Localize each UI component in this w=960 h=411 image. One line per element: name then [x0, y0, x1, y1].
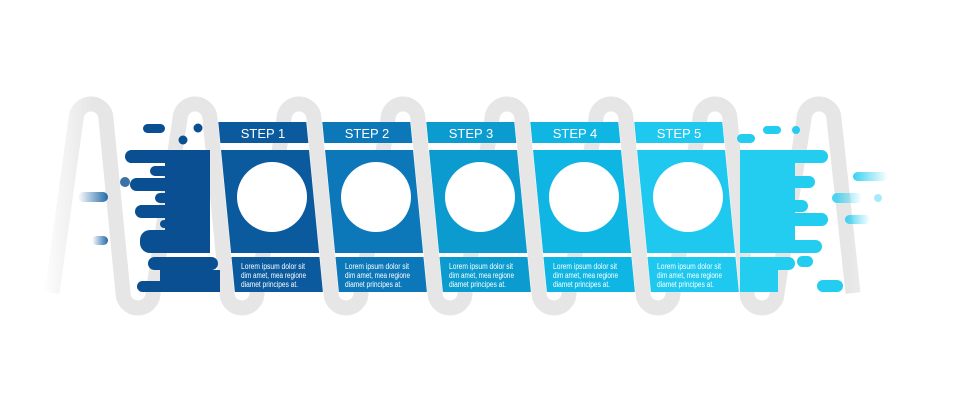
descriptions: diamet principes at.: [553, 280, 610, 289]
circles: [237, 162, 723, 232]
descriptions: Lorem ipsum dolor sit: [241, 262, 306, 271]
descriptions: dim amet, mea regione: [241, 271, 306, 280]
panel: step 3: [426, 122, 531, 292]
step labels: [241, 126, 701, 141]
step labels: STEP 1: [241, 126, 285, 141]
panel: step 1: [218, 122, 323, 292]
descriptions: diamet principes at.: [449, 280, 506, 289]
step labels: STEP 4: [553, 126, 597, 141]
descriptions: diamet principes at.: [345, 280, 402, 289]
left swoosh: [120, 124, 220, 292]
panel: step 4: [530, 122, 635, 292]
right swoosh: [737, 126, 843, 292]
panel: step 2: [322, 122, 427, 292]
descriptions: Lorem ipsum dolor sit: [345, 262, 410, 271]
descriptions: diamet principes at.: [241, 280, 298, 289]
panel: step 5: [634, 122, 739, 292]
descriptions: [241, 262, 722, 289]
step labels: STEP 2: [345, 126, 389, 141]
wave: grey serpentine: [52, 104, 853, 308]
descriptions: diamet principes at.: [657, 280, 714, 289]
descriptions: dim amet, mea regione: [449, 271, 514, 280]
descriptions: dim amet, mea regione: [657, 271, 722, 280]
descriptions: Lorem ipsum dolor sit: [553, 262, 618, 271]
descriptions: dim amet, mea regione: [553, 271, 618, 280]
right faded streaks: [832, 172, 888, 224]
descriptions: Lorem ipsum dolor sit: [449, 262, 514, 271]
step labels: STEP 5: [657, 126, 701, 141]
descriptions: Lorem ipsum dolor sit: [657, 262, 722, 271]
panels (slanted): [218, 122, 739, 292]
step labels: STEP 3: [449, 126, 493, 141]
left faded streaks: [78, 192, 108, 245]
descriptions: dim amet, mea regione: [345, 271, 410, 280]
